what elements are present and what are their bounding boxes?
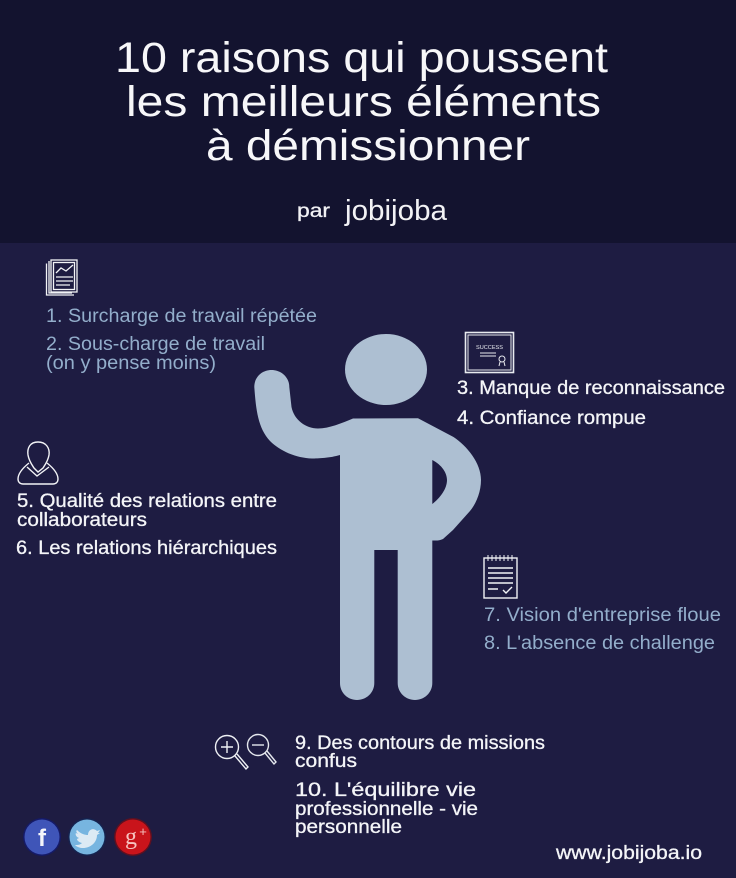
icon: twitter <box>68 818 106 856</box>
byline: par jobijoba: par <box>297 201 331 222</box>
icon: checklist notepad <box>484 555 517 598</box>
group: reasons 3 and 4 <box>457 332 725 429</box>
text: reason 5 <box>17 491 277 531</box>
icon: person bust <box>18 442 58 484</box>
text: reason 4: 4. Confiance rompue <box>457 408 646 429</box>
figure: waving person <box>254 334 481 700</box>
social icons <box>23 818 152 856</box>
text: reason 1: 1. Surcharge de travail répétée <box>46 306 317 327</box>
text: reason 10: professionnelle - vie <box>295 799 478 820</box>
icon: success certificate <box>466 332 514 372</box>
panel: header <box>0 0 736 243</box>
text: reason 2: (on y pense moins) <box>46 353 216 374</box>
text: reason 10: 10. L'équilibre vie <box>295 780 476 801</box>
byline: par jobijoba <box>297 195 448 227</box>
group: reasons 5 and 6 <box>16 442 277 559</box>
title: 10 raisons qui poussent <box>115 34 608 82</box>
group: reasons 9 and 10 <box>216 733 545 838</box>
icon: google plus: + <box>139 824 147 839</box>
text: reason 2 <box>46 334 265 374</box>
text: reason 10 <box>295 780 478 838</box>
icon: google plus <box>114 818 152 856</box>
text: reason 9 <box>295 733 545 772</box>
text: reason 9: confus <box>295 751 357 772</box>
text: reason 5: 5. Qualité des relations entre <box>17 491 277 512</box>
icon: facebook: f <box>38 825 47 852</box>
group: reasons 1 and 2 <box>46 260 317 374</box>
title: à démissionner <box>206 122 530 170</box>
body <box>254 370 481 700</box>
text: reason 9: 9. Des contours de missions <box>295 733 545 754</box>
title <box>115 34 608 170</box>
byline: par jobijoba: jobijoba <box>344 195 448 227</box>
icon: zoom out magnifier <box>248 734 276 764</box>
text: reason 2: 2. Sous-charge de travail <box>46 334 265 355</box>
title: les meilleurs éléments <box>126 78 601 126</box>
website url: www.jobijoba.io <box>555 843 702 864</box>
icon: success certificate: SUCCESS <box>476 345 504 351</box>
icon: zoom in magnifier <box>216 736 248 769</box>
text: reason 10: personnelle <box>295 817 402 838</box>
head <box>345 334 427 405</box>
text: reason 6: 6. Les relations hiérarchiques <box>16 538 277 559</box>
group: reasons 7 and 8 <box>484 555 721 654</box>
icon: report document <box>46 260 77 295</box>
text: reason 3: 3. Manque de reconnaissance <box>457 378 725 399</box>
icon: google plus: g <box>125 824 137 850</box>
text: reason 7: 7. Vision d'entreprise floue <box>484 605 721 626</box>
text: reason 8: 8. L'absence de challenge <box>484 633 715 654</box>
text: reason 5: collaborateurs <box>17 510 147 531</box>
